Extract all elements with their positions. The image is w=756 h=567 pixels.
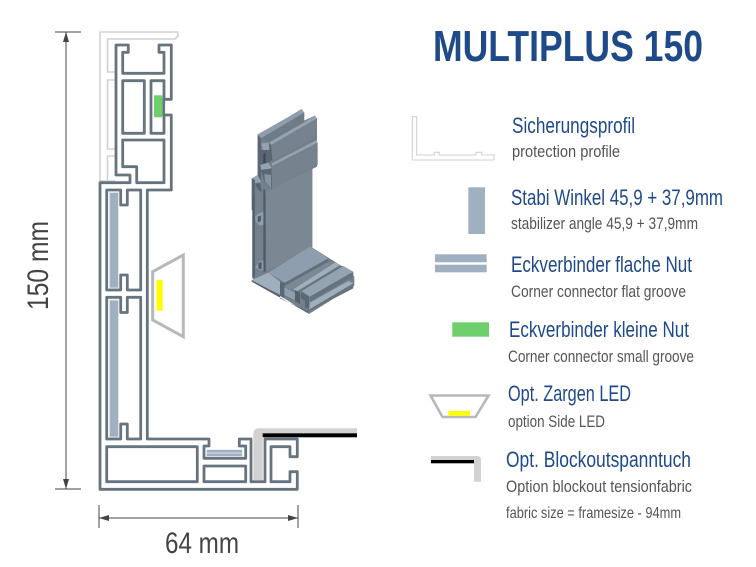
small groove connector	[154, 95, 162, 117]
legend: side LED: option Side LED	[508, 412, 605, 431]
blockout tension fabric	[253, 428, 357, 480]
main aluminium frame outline	[100, 45, 297, 489]
side LED	[153, 255, 183, 337]
protection profile outline	[100, 32, 178, 181]
legend: flat groove connector: Corner connector flat groove	[511, 282, 686, 301]
cross-section drawing of the profile	[100, 32, 357, 489]
dimension: height 150 mm: 150 mm	[22, 221, 55, 310]
legend: protection profile: protection profile	[512, 142, 620, 161]
icon: blockout fabric	[431, 456, 481, 482]
flat groove connector	[206, 449, 243, 457]
legend: small groove connector: Eckverbinder kleine Nut	[509, 317, 689, 342]
legend: blockout fabric: Opt. Blockoutspanntuch	[506, 447, 691, 472]
upper chambers	[123, 81, 164, 183]
icon: stabilizer	[468, 187, 485, 234]
legend: protection profile	[412, 113, 635, 161]
icon: protection profile	[412, 117, 494, 160]
legend: side LED	[430, 381, 631, 431]
legend: protection profile: Sicherungsprofil	[512, 113, 635, 138]
legend: blockout fabric	[431, 447, 692, 522]
legend: stabilizer angle	[468, 185, 723, 234]
legend: side LED: Opt. Zargen LED	[508, 381, 631, 406]
legend: small groove connector	[452, 317, 694, 366]
legend: small groove connector: Corner connector small groove	[508, 347, 694, 366]
icon: side LED	[430, 396, 488, 417]
dimension: width 64 mm: 64 mm	[165, 527, 239, 560]
legend: flat groove connector	[435, 252, 692, 301]
left wall	[252, 195, 266, 278]
legend: stabilizer angle: stabilizer angle 45,9 + 37,9mm	[511, 214, 698, 233]
legend: blockout fabric: fabric size = framesize - 94mm	[506, 505, 681, 522]
stabilizer angles	[110, 192, 118, 288]
silhouette and back panel	[252, 109, 354, 314]
icon: green bar	[452, 322, 489, 337]
icon: flat groove bars	[435, 254, 487, 272]
dimension: height 150 mm	[22, 32, 81, 489]
floor and lower rails	[252, 247, 353, 313]
3D render of the profile	[252, 109, 354, 314]
upper rails	[252, 109, 318, 210]
legend: blockout fabric: Option blockout tensionfabric	[506, 477, 692, 496]
tall inner chambers	[107, 190, 246, 482]
legend: flat groove connector: Eckverbinder flache Nut	[511, 252, 692, 277]
dimension: width 64 mm	[99, 505, 298, 560]
